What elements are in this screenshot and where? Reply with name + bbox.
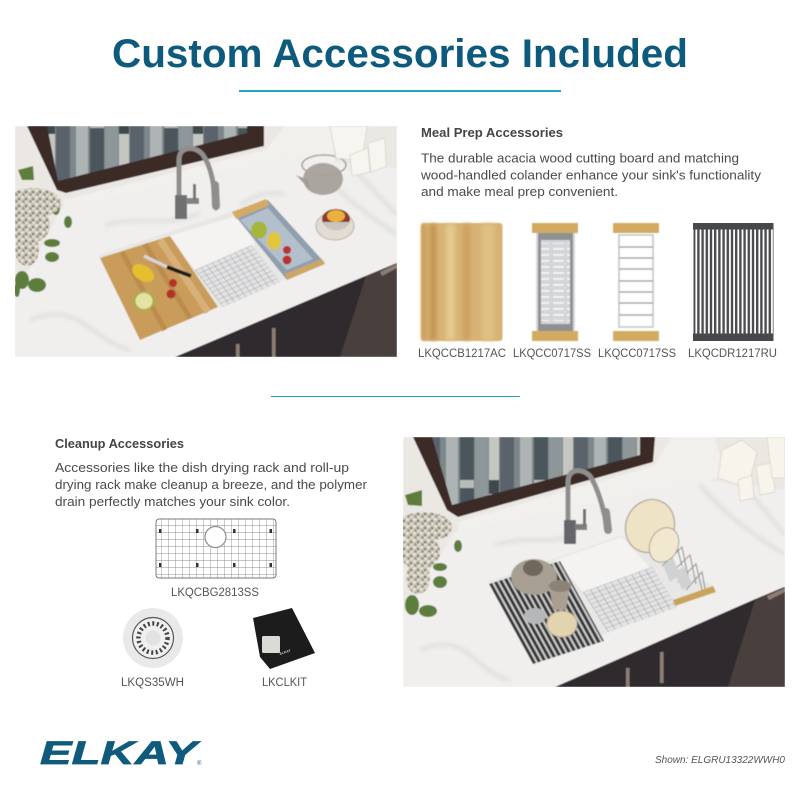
cabinet [555,587,785,687]
faucet base [175,195,187,219]
canisters [718,437,785,501]
backsplash [65,127,334,206]
marble veins [30,165,397,350]
text: cleanup description: drying rack make cleanup a breeze, and the polymer [55,477,368,492]
heading: meal prep accessories: Meal Prep Accessories [421,125,563,140]
faucet base [564,520,576,544]
kettle body [511,559,557,595]
product: cutting board [421,223,502,341]
text: cleanup description: Accessories like the dish drying rack and roll-up [55,460,349,475]
cutting board [100,236,218,340]
apple half [134,292,154,310]
window glass with city view [432,437,640,505]
photo: cleanup sink scene [396,437,785,687]
marble veins [420,480,785,680]
section divider [271,396,520,397]
title underline [239,90,561,92]
backsplash [459,438,720,530]
photo: meal prep sink scene [5,126,397,357]
text: meal prep description: The durable acacia wood cutting board and matching [421,150,739,166]
cabinet [175,263,397,357]
label: LKQCC0717SS rack: LKQCC0717SS [598,348,676,360]
window glass with city view [47,126,247,181]
bottom grid rack [195,245,280,307]
shown model note: Shown: ELGRU13322WWH0 [655,754,785,766]
knife [144,256,167,267]
dishwasher panel [340,263,397,357]
drying rack stand [641,528,706,594]
window frame [27,126,264,193]
bowl [547,611,577,637]
text: meal prep description: wood-handled colander enhance your sink's functionality [420,168,762,182]
product: drying rack insert [613,223,659,341]
saucer and tea cup [316,212,354,240]
product: roll-up drying mat [693,223,774,341]
label: LKQS35WH: LKQS35WH [121,677,184,689]
title: Custom Accessories Included [112,32,688,76]
product: bottom grid [156,519,276,578]
heading: cleanup accessories: Cleanup Accessories [55,436,184,451]
Elkay logo: ® [197,760,202,767]
label: LKQCBG2813SS: LKQCBG2813SS [171,587,259,599]
product: cleaning kit towel and sponge [253,608,315,669]
smaller plate [644,523,684,567]
label: LKCLKIT: LKCLKIT [262,677,307,689]
lemon slices [132,264,154,282]
label: LKQCC0717SS colander: LKQCC0717SS [513,348,591,360]
product: colander [532,223,578,341]
sink front wall [556,537,650,592]
strawberries [169,279,177,287]
sink basin [98,200,325,340]
faucet [568,471,608,530]
cabinet handles [626,588,785,687]
marble countertop [15,158,397,357]
text: meal prep description [420,150,762,199]
product: cleaning kit towel and sponge: ELKAY [279,648,292,656]
wall [403,437,785,614]
text: cleanup description: drain perfectly matches your sink color. [55,494,290,509]
plate [617,491,683,561]
drain lid [524,608,546,624]
plant [396,490,462,617]
label: LKQCCB1217AC: LKQCCB1217AC [418,348,506,360]
label: LKQCDR1217RU: LKQCDR1217RU [688,348,777,360]
bottom grid rack [583,567,677,632]
colander [232,200,325,280]
colander wood handles [232,199,270,219]
product: polymer drain [123,608,183,668]
faucet [179,148,216,208]
kettle [303,163,343,195]
fruit in colander [251,222,267,238]
window frame [413,437,655,517]
marble countertop [403,480,785,687]
sink front wall [170,215,255,270]
candles [330,126,386,176]
plant [15,166,72,298]
sink basin [576,588,598,628]
wall [15,126,397,284]
text: meal prep description: and make meal prep convenient. [421,184,618,199]
wood bar [673,586,716,606]
Elkay logo [40,735,202,771]
dishwasher panel [728,587,785,687]
roll-up mat on sink [489,561,604,664]
rack dishes [663,558,692,590]
cup [549,586,570,610]
cabinet handles [236,264,397,357]
Elkay logo: ELKAY [40,735,201,771]
text: cleanup description [55,460,368,509]
